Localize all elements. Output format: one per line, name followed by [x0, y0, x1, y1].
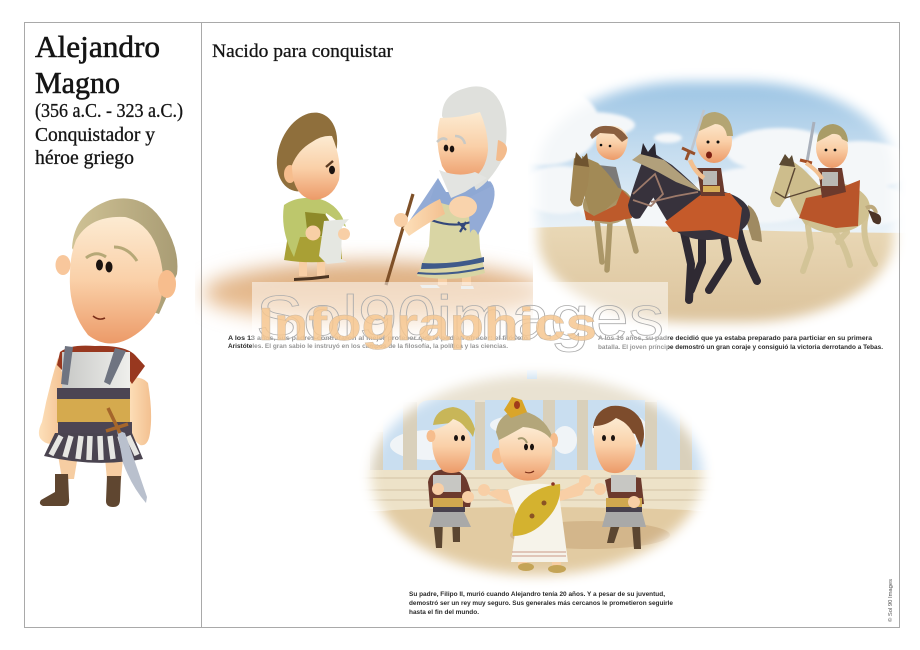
caption: first battle [598, 335, 883, 351]
saddle cloth [799, 180, 860, 228]
sword [117, 430, 147, 503]
title block: Conquistador y [35, 125, 155, 146]
arms [403, 199, 445, 236]
watermark: Infographics [258, 298, 597, 350]
arena floor [374, 507, 700, 582]
body [666, 190, 750, 240]
staff [386, 194, 413, 285]
rider [598, 165, 623, 200]
scroll [319, 219, 349, 264]
columns [370, 400, 692, 470]
clouds [390, 416, 645, 460]
arms [39, 358, 65, 444]
sky [532, 74, 900, 233]
caption: Aristotle: Aristóteles. El gran sabio le instruyó en los campos de la filosofía, la política y las ciencias. [228, 343, 508, 350]
figure: left general [426, 407, 475, 548]
brows eyes nose mouth [86, 247, 137, 261]
caption: king [409, 591, 673, 616]
hair [72, 198, 177, 314]
eyes brows [437, 136, 465, 144]
hair [442, 86, 507, 190]
legs [597, 216, 636, 270]
title block: héroe griego [35, 148, 134, 169]
title block: Magno [35, 65, 120, 100]
caption: king: Su padre, Filipo II, murió cuando Alejandro tenía 20 años. Y a pesar de su juventud, [409, 591, 665, 598]
figure: young Alexander [266, 103, 350, 281]
title block: (356 a.C. - 323 a.C.) [35, 101, 183, 122]
stone wall [366, 370, 657, 470]
legs [58, 455, 123, 480]
skirt [44, 433, 143, 463]
rider [697, 168, 725, 196]
caption: king: hasta el fin del mundo. [409, 609, 479, 616]
illustration: first battle on horseback [531, 74, 901, 330]
saddle cloth [665, 193, 742, 240]
ground [531, 226, 901, 330]
figure: right horse and rider [770, 122, 881, 271]
watermark: Sol90images [256, 284, 664, 353]
ground shadow [203, 262, 547, 324]
figure: centre black horse and rider [628, 110, 762, 300]
sidebar divider [200, 22, 202, 628]
title block [35, 29, 183, 169]
seating steps [350, 470, 730, 510]
heading: section: Nacido para conquistar [212, 42, 393, 62]
illustration: Alexander portrait [39, 198, 177, 507]
figure: king Alexander [478, 397, 591, 573]
sky openings [383, 370, 712, 470]
caption: first battle: A los 16 años, su padre decidió que ya estaba preparado para particiar en su primera [598, 335, 873, 342]
armour [62, 352, 130, 390]
saddle cloth [584, 190, 632, 222]
legs [803, 215, 875, 271]
tunic [417, 195, 485, 279]
figure: left horse and rider [570, 126, 636, 270]
crown [504, 397, 527, 418]
caption: Aristotle: A los 13 años, sus padres contrataron al mejor profesor que le podían ofrecer: el filósofo [228, 335, 528, 342]
caption: Aristotle [228, 335, 528, 350]
illustration: young king with generals [364, 370, 710, 582]
body [583, 186, 633, 224]
rider [818, 168, 846, 198]
body [798, 183, 870, 233]
legs [684, 228, 757, 300]
caption: king: demostró ser un rey muy seguro. Sus generales más cercanos le prometieron seguirle [409, 600, 673, 607]
illustration: Alexander with Aristotle [203, 86, 547, 324]
credit: © Sol 90 Images [887, 579, 894, 622]
tunic sleeves [57, 346, 145, 384]
ear left [56, 255, 70, 275]
clouds [534, 98, 898, 226]
caption: first battle: batalla. El joven príncipe demostró un gran coraje y consiguió la victoria derrotando a Tebas. [598, 344, 883, 351]
bridle [633, 174, 698, 206]
title block: Alejandro [35, 29, 160, 64]
figure: Aristotle [386, 86, 507, 289]
face [70, 217, 163, 344]
tail [746, 205, 762, 242]
mane [632, 154, 702, 192]
mantle [406, 178, 495, 235]
beard [439, 170, 487, 198]
figure: right general [593, 406, 646, 549]
